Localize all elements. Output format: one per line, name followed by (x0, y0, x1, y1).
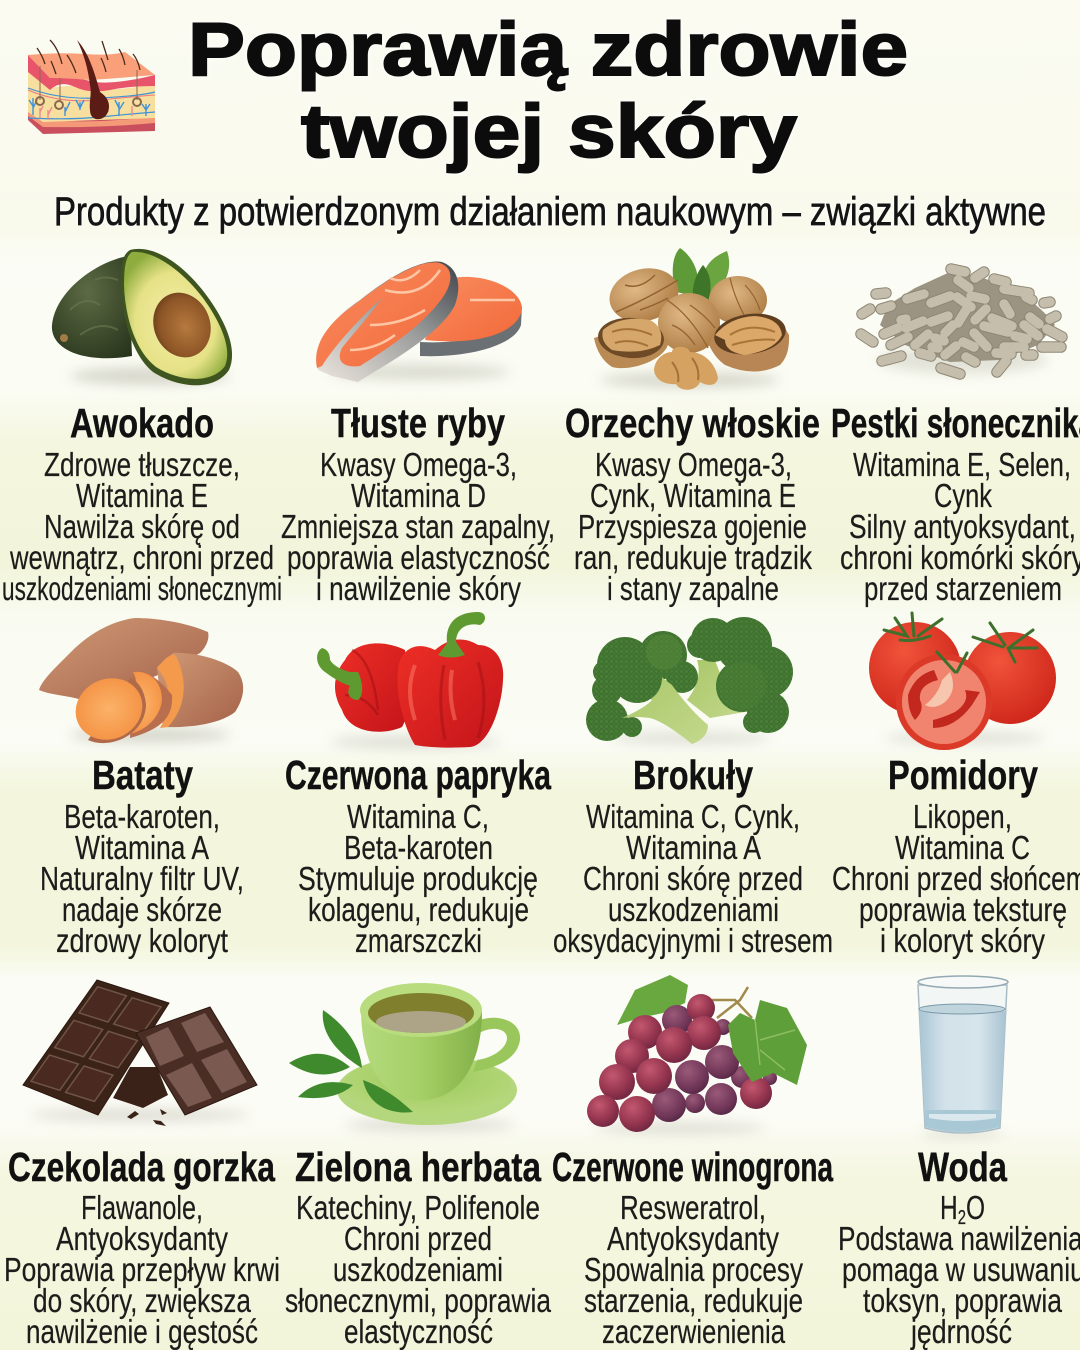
icon: red grapes (587, 975, 807, 1134)
text block: Chroni przed (344, 1220, 492, 1257)
text block (285, 1189, 552, 1350)
heading: Awokado (70, 400, 214, 446)
text block: nadaje skórze (62, 891, 222, 928)
text block: uszkodzeniami słonecznymi (2, 570, 282, 607)
text block: Katechiny, Polifenole (296, 1189, 540, 1226)
heading: Czekolada gorzka (8, 1144, 276, 1190)
text block: Witamina E (76, 477, 208, 514)
icon: tomatoes (869, 613, 1056, 750)
text block: Witamina D (351, 477, 486, 514)
text block: Zdrowe tłuszcze, (44, 446, 240, 483)
icon: sweet potatoes (39, 618, 243, 751)
icon: broccoli (586, 617, 793, 744)
icon: red peppers (317, 612, 503, 748)
text block: wewnątrz, chroni przed (9, 539, 274, 576)
text block: oksydacyjnymi i stresem (553, 922, 833, 959)
text block: ran, redukuje trądzik (574, 539, 812, 576)
icon: salmon steaks (316, 262, 522, 382)
heading: Bataty (92, 752, 193, 798)
text block (838, 1189, 1080, 1350)
panel: Czerwone winogrona (552, 975, 834, 1350)
text block (584, 1189, 803, 1350)
text block: kolagenu, redukuje (308, 891, 529, 928)
heading: Woda (918, 1144, 1008, 1190)
text block: nawilżenie i gęstość (26, 1313, 258, 1350)
text block (553, 798, 833, 959)
text block: H (940, 1189, 964, 1226)
text block: do skóry, zwiększa (33, 1282, 252, 1319)
text block: Spowalnia procesy (584, 1251, 803, 1288)
panel: Zielona herbata (285, 983, 552, 1350)
text block: Kwasy Omega-3, (320, 446, 517, 483)
panel: Bataty (39, 618, 244, 959)
text block: Likopen, (913, 798, 1012, 835)
panel: Awokado (2, 249, 282, 607)
text block: Witamina C, Cynk, (586, 798, 800, 835)
text block: Witamina C (895, 829, 1030, 866)
text block (298, 798, 538, 959)
text block (2, 446, 282, 607)
panel: Pestki słonecznika (831, 269, 1080, 607)
text block (281, 446, 555, 607)
text block: Kwasy Omega-3, (595, 446, 792, 483)
text block: Witamina A (75, 829, 209, 866)
text block (574, 446, 812, 607)
heading: Zielona herbata (295, 1144, 542, 1190)
text block: zmarszczki (355, 922, 482, 959)
panel: Tłuste ryby (281, 262, 555, 607)
heading: Tłuste ryby (331, 400, 505, 446)
text block: Beta-karoten (344, 829, 493, 866)
heading: Czerwona papryka (285, 752, 552, 798)
text block: jędrność (910, 1313, 1012, 1350)
text block: Chroni skórę przed (583, 860, 803, 897)
text block (4, 1189, 280, 1350)
text block (40, 798, 244, 959)
icon: green tea cup (289, 983, 520, 1131)
panel: Czerwona papryka (285, 612, 552, 959)
text block: i nawilżenie skóry (316, 570, 521, 607)
text block: Naturalny filtr UV, (40, 860, 244, 897)
text block: Antyoksydanty (56, 1220, 228, 1257)
text block: zaczerwienienia (602, 1313, 785, 1350)
text block: Cynk, Witamina E (590, 477, 796, 514)
text block: Stymuluje produkcję (298, 860, 538, 897)
text block: Witamina C, (347, 798, 489, 835)
icon: skin cross-section (28, 40, 155, 134)
title (188, 7, 908, 173)
text block: i stany zapalne (607, 570, 779, 607)
text block: Resweratrol, (620, 1189, 766, 1226)
text block: poprawia elastyczność (287, 539, 550, 576)
heading: Czerwone winogrona (552, 1144, 834, 1190)
icon: dark chocolate (23, 980, 257, 1126)
icon: glass of water (918, 976, 1008, 1138)
text block: zdrowy koloryt (56, 922, 228, 959)
text block: i koloryt skóry (880, 922, 1045, 959)
title: twojej skóry (301, 89, 797, 173)
panel: Woda (838, 976, 1080, 1350)
heading: Brokuły (633, 752, 753, 798)
heading: Orzechy włoskie (565, 400, 820, 446)
text block: uszkodzeniami (333, 1251, 503, 1288)
icon: sunflower seeds (861, 269, 1062, 374)
text block (832, 798, 1080, 959)
text block: Przyspiesza gojenie (578, 508, 807, 545)
heading: Pomidory (888, 752, 1038, 798)
text block: Nawilża skórę od (44, 508, 240, 545)
text block: słonecznymi, poprawia (285, 1282, 552, 1319)
text block (840, 446, 1080, 607)
icon: avocado (52, 249, 232, 385)
text block: Poprawia przepływ krwi (4, 1251, 280, 1288)
panel: Orzechy włoskie (565, 248, 820, 607)
panel: Brokuły (553, 617, 833, 959)
title: Poprawią zdrowie (188, 7, 908, 91)
text block: O (966, 1189, 985, 1226)
text block: uszkodzeniami (608, 891, 779, 928)
panel: Czekolada gorzka (4, 980, 280, 1350)
text block: 2 (958, 1207, 966, 1229)
text block: Flawanole, (81, 1189, 203, 1226)
text block: starzenia, redukuje (584, 1282, 803, 1319)
text block: Beta-karoten, (64, 798, 220, 835)
panel: Pomidory (832, 613, 1080, 959)
icon: walnuts (594, 248, 789, 390)
text block: Zmniejsza stan zapalny, (281, 508, 555, 545)
text block: Witamina A (626, 829, 761, 866)
text block: Antyoksydanty (607, 1220, 779, 1257)
text block: Cynk (934, 477, 992, 514)
text block: elastyczność (344, 1313, 493, 1350)
